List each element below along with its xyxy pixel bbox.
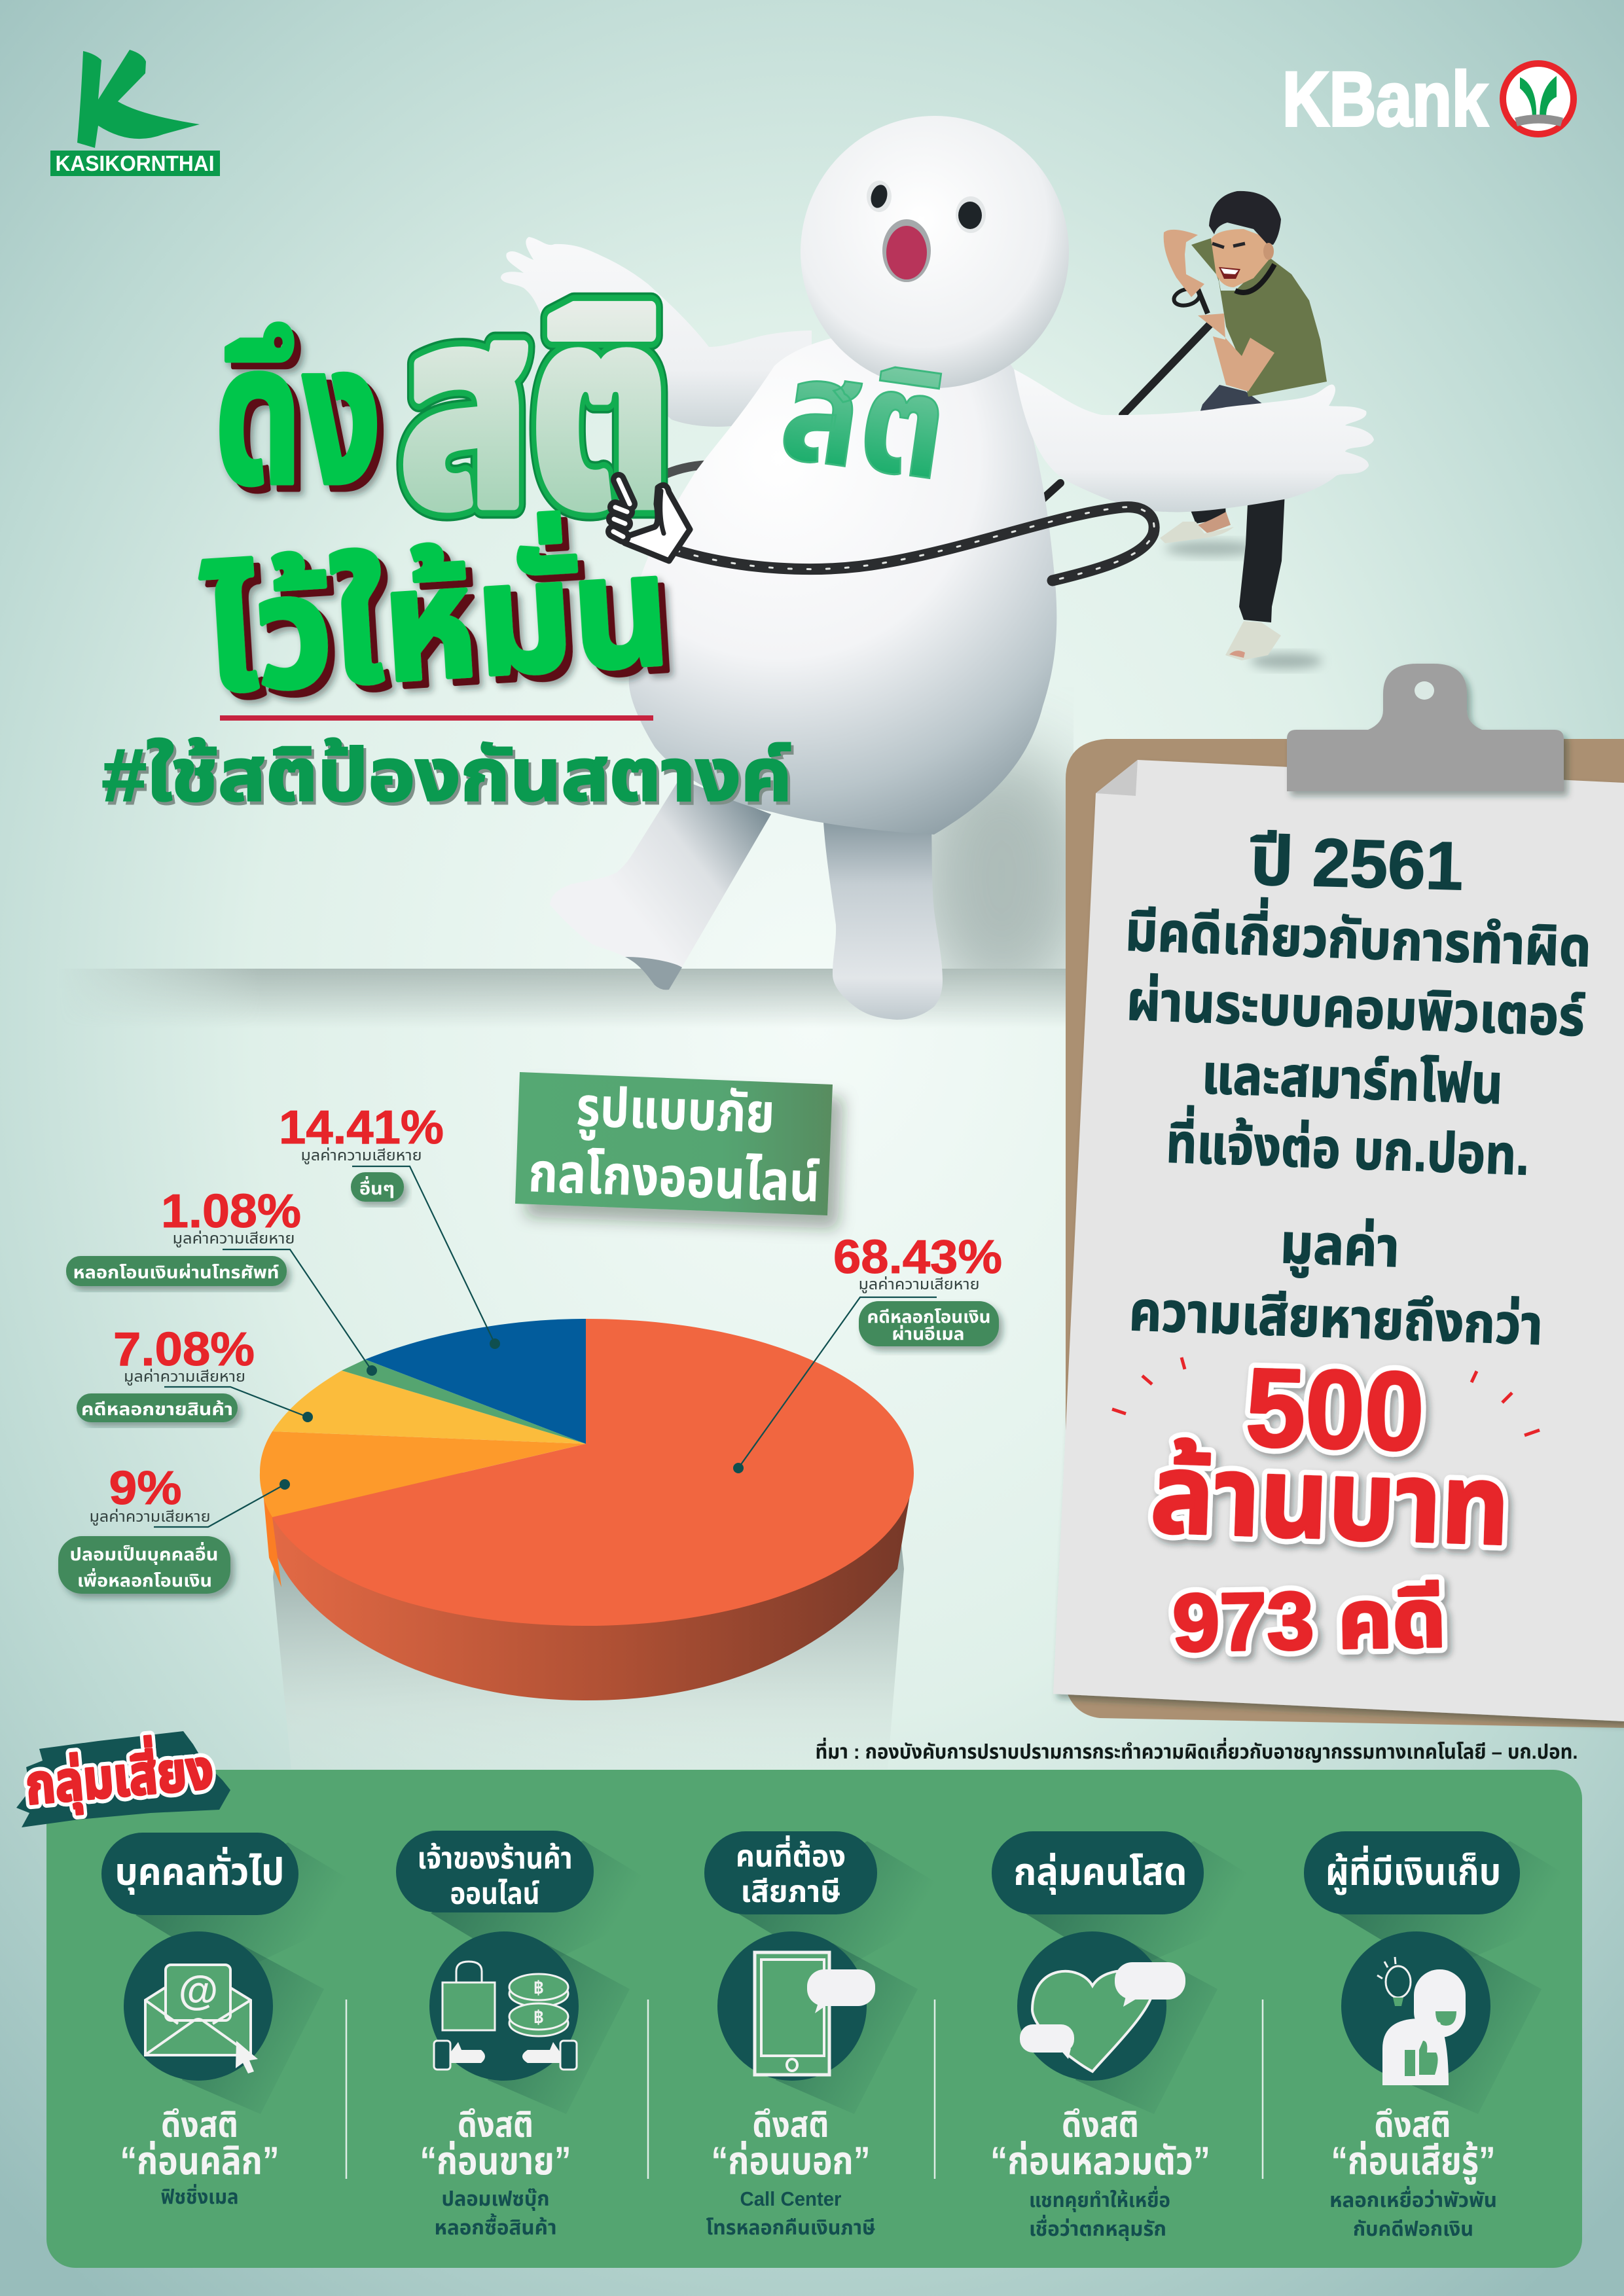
icon: heart with chat bubbles xyxy=(1020,1962,1185,2072)
column 5: savers: กับคดีฟอกเงิน xyxy=(1353,2217,1473,2240)
slippers xyxy=(1160,522,1234,543)
case heading text: ปี 2561 xyxy=(1249,823,1464,905)
label: 1.08%: มูลค่าความเสียหาย xyxy=(173,1230,295,1248)
column 4: singles: เชื่อว่าตกหลุมรัก xyxy=(1029,2214,1166,2241)
label: 14.41% xyxy=(279,1102,444,1202)
500: 500 xyxy=(1244,1345,1426,1475)
eyes and mouth xyxy=(867,181,986,282)
arms xyxy=(1164,230,1204,297)
label: 68.43%: ผ่านอีเมล xyxy=(892,1324,965,1344)
column 5: savers: ผู้ที่มีเงินเก็บ xyxy=(1326,1845,1501,1895)
leader lines xyxy=(154,1166,937,1527)
pants xyxy=(1198,385,1283,432)
column 2: online shop owners: เจ้าของร้านค้า xyxy=(418,1841,572,1875)
case heading text: มีคดีเกี่ยวกับการทำผิด xyxy=(1125,892,1593,978)
hashtag: #ใช้สติป้องกันสตางค์ xyxy=(105,738,795,819)
icon: person with bulb and thumbs up xyxy=(1377,1957,1466,2085)
500: 500 xyxy=(1244,1345,1426,1475)
face and hair xyxy=(1211,229,1270,287)
pie shadow xyxy=(273,1532,904,1769)
title: สติ glass letters: สติ xyxy=(399,260,672,562)
column 1: general public: ฟิชชิ่งเมล xyxy=(161,2183,238,2208)
label: 7.08%: คดีหลอกขายสินค้า xyxy=(81,1399,233,1419)
left leg xyxy=(550,779,771,990)
hashtag: #ใช้สติป้องกันสตางค์ xyxy=(102,734,792,816)
title: สติ glass letters: สติ xyxy=(399,260,672,562)
label: 9%: 9% xyxy=(109,1462,182,1515)
pie chart title box: รูปแบบภัย xyxy=(575,1076,776,1147)
risk group badge: กลุ่มเสี่ยง xyxy=(22,1730,216,1818)
shirt xyxy=(1191,238,1327,397)
column 2: online shop owners: ปลอมเฟซบุ๊ก xyxy=(441,2187,550,2211)
column 3: taxpayers: โทรหลอกคืนเงินภาษี xyxy=(706,2216,876,2239)
column 2: online shop owners: หลอกซื้อสินค้า xyxy=(435,2213,556,2239)
icon: shopping bag, coins and hands xyxy=(434,1962,577,2070)
slice: email 68.43% xyxy=(272,1319,914,1626)
column 1: general public: “ก่อนคลิก” xyxy=(120,2139,279,2183)
column 4: singles: กลุ่มคนโสด xyxy=(1013,1851,1187,1895)
board xyxy=(1066,739,1624,1728)
column 3: taxpayers xyxy=(704,1831,877,2239)
icon: smartphone with speech bubble xyxy=(755,1952,875,2075)
head xyxy=(801,116,1069,388)
icon: shopping bag, coins and hands: ฿ xyxy=(533,1978,544,1998)
column 4: singles xyxy=(990,1831,1210,2241)
damage value text xyxy=(1128,1213,1543,1356)
ล้านบาท: ล้านบาท xyxy=(1149,1432,1511,1569)
label: 1.08%: หลอกโอนเงินผ่านโทรศัพท์ xyxy=(73,1263,280,1282)
column 5: savers: “ก่อนเสียรู้” xyxy=(1331,2139,1495,2185)
icon: envelope: @ xyxy=(179,1968,218,2013)
pie chart title box: กลโกงออนไลน์ xyxy=(528,1141,821,1213)
case heading text: ผ่านระบบคอมพิวเตอร์ xyxy=(1126,970,1585,1047)
damage value text: ความเสียหายถึงกว่า xyxy=(1128,1280,1543,1356)
label: 1.08%: 1.08% xyxy=(161,1185,301,1238)
slice: impersonation 9% xyxy=(260,1431,586,1517)
case heading text: และสมาร์ทโฟน xyxy=(1201,1043,1504,1115)
pie side wall xyxy=(260,1473,914,1700)
clipboard xyxy=(1053,664,1624,1728)
logo: Kasikornthai xyxy=(50,50,220,176)
chest text สติ: สติ xyxy=(772,328,956,510)
right arm xyxy=(1014,369,1374,512)
rope behind body xyxy=(664,465,713,475)
title: สติ glass letters: สติ xyxy=(399,260,672,562)
mascot scene xyxy=(501,116,1374,1020)
title: ไว้ให้มั่น: ไว้ให้มั่น xyxy=(198,506,674,725)
floor horizon shadow xyxy=(59,746,1093,1028)
label: 9%: ปลอมเป็นบุคคลอื่น xyxy=(69,1542,219,1565)
body xyxy=(628,327,1056,834)
paper xyxy=(1053,760,1624,1721)
icon: gripping hand xyxy=(612,480,690,561)
title: ดึง: ดึง xyxy=(221,312,388,531)
label: 68.43% xyxy=(833,1231,1002,1346)
column 3: taxpayers: “ก่อนบอก” xyxy=(711,2139,871,2183)
column 3: taxpayers: ดึงสติ xyxy=(753,2106,829,2145)
panel: risk groups xyxy=(46,1770,1608,2268)
label: 68.43%: คดีหลอกโอนเงิน xyxy=(867,1307,991,1327)
long shadows xyxy=(135,1840,1608,2114)
label: 14.41%: 14.41% xyxy=(279,1102,444,1154)
slice: other 14.41% xyxy=(365,1319,586,1444)
slice: phone 1.08% xyxy=(342,1359,586,1444)
column 5: savers: ดึงสติ xyxy=(1375,2106,1451,2145)
damage value text: มูลค่า xyxy=(1279,1213,1401,1281)
right leg xyxy=(823,812,943,1020)
logo: Kasikornthai: KASIKORNTHAI xyxy=(55,151,215,175)
label: 68.43%: มูลค่าความเสียหาย xyxy=(859,1276,979,1294)
label: 7.08% xyxy=(77,1323,255,1422)
label: 7.08%: มูลค่าความเสียหาย xyxy=(124,1368,245,1386)
column 1: general public: ดึงสติ xyxy=(161,2106,238,2145)
title: ไว้ให้มั่น: ไว้ให้มั่น xyxy=(205,512,681,732)
column 1: general public: บุคคลทั่วไป xyxy=(115,1846,284,1895)
label: 68.43%: 68.43% xyxy=(833,1231,1002,1283)
pie chart xyxy=(154,1166,937,1769)
label: 9% xyxy=(58,1462,230,1594)
column 4: singles: ดึงสติ xyxy=(1062,2106,1139,2145)
973 คดี: 973 คดี xyxy=(1172,1573,1447,1669)
man pulling rope xyxy=(1039,191,1327,669)
logo: KBank: KBank xyxy=(1282,56,1488,143)
column 3: taxpayers: คนที่ต้อง xyxy=(736,1835,846,1873)
973 คดี: 973 คดี xyxy=(1172,1573,1447,1669)
label: 14.41%: มูลค่าความเสียหาย xyxy=(301,1147,422,1165)
paper corner fold xyxy=(1096,760,1138,796)
label: 14.41%: อื่นๆ xyxy=(359,1176,395,1198)
label: 7.08%: 7.08% xyxy=(113,1323,255,1376)
rope around body xyxy=(676,507,1154,581)
clip xyxy=(1287,664,1564,791)
label: 1.08% xyxy=(66,1185,301,1286)
left arm xyxy=(501,237,812,427)
pie chart title box xyxy=(515,1072,833,1215)
burst rays xyxy=(1112,1357,1540,1435)
column 2: online shop owners: ดึงสติ xyxy=(458,2106,533,2145)
column 5: savers: หลอกเหยื่อว่าพัวพัน xyxy=(1329,2185,1497,2212)
column 1: general public xyxy=(101,1833,298,2208)
label: 9%: มูลค่าความเสียหาย xyxy=(89,1508,211,1526)
slice: goods 7.08% xyxy=(272,1371,586,1444)
title: ดึง: ดึง xyxy=(215,305,381,525)
source note: ที่มา : กองบังคับการปราบปรามการกระทำความผิดเกี่ยวกับอาชญากรรมทางเทคโนโลยี – บก.ปอท. xyxy=(816,1737,1578,1763)
column 5: savers xyxy=(1304,1831,1520,2240)
risk group badge: กลุ่มเสี่ยง xyxy=(22,1730,216,1818)
column 2: online shop owners xyxy=(396,1831,594,2239)
case heading text xyxy=(1125,823,1593,1187)
column 4: singles: “ก่อนหลวมตัว” xyxy=(990,2139,1210,2183)
column 2: online shop owners: ออนไลน์ xyxy=(450,1876,539,1910)
column 3: taxpayers: เสียภาษี xyxy=(741,1874,840,1909)
column 4: singles: แชทคุยทำให้เหยื่อ xyxy=(1029,2185,1170,2212)
label: 9%: เพื่อหลอกโอนเงิน xyxy=(77,1568,212,1590)
icon: envelope xyxy=(145,1965,258,2073)
red underline xyxy=(220,715,653,721)
dividers xyxy=(346,2000,1263,2179)
case heading text: ที่แจ้งต่อ บก.ปอท. xyxy=(1165,1104,1530,1187)
column 2: online shop owners: “ก่อนขาย” xyxy=(420,2139,571,2183)
column 3: taxpayers: Call Center xyxy=(740,2187,842,2210)
icon: shopping bag, coins and hands: ฿ xyxy=(533,2007,544,2028)
ล้านบาท: ล้านบาท xyxy=(1149,1432,1511,1569)
